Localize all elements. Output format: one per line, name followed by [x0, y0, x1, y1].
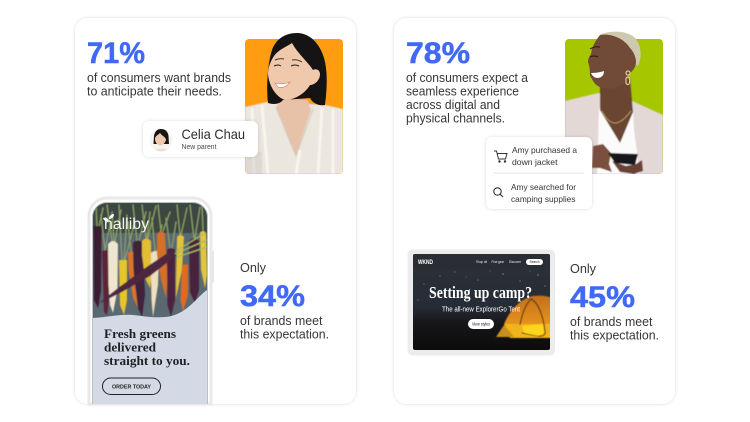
text: seamless experience: of consumers expect a [406, 70, 529, 85]
photo: smiling woman on orange [245, 33, 343, 174]
panel: seamless experience card [394, 18, 675, 404]
text: anticipate needs [87, 70, 231, 98]
panel: personalization card [75, 18, 356, 404]
headline: fresh greens: Fresh greens [104, 327, 176, 341]
stat block: 45%: Only [570, 261, 596, 276]
chip: customer journey activity [486, 137, 592, 209]
logo: halliby: halliby [104, 216, 149, 233]
headline: fresh greens [104, 327, 190, 368]
stat: 78%: 78% [406, 37, 470, 70]
text: searched camping: camping supplies [511, 194, 576, 204]
nav: WKND: Search [530, 260, 540, 264]
button: order today: ORDER TODAY [112, 384, 151, 390]
text: anticipate needs: to anticipate their needs. [87, 84, 222, 98]
text: searched camping [511, 182, 576, 204]
button: view styles: View styles [472, 322, 491, 327]
stat block: 34% [240, 260, 329, 342]
stat block: 45%: this expectation. [570, 328, 659, 342]
headline: fresh greens: delivered [104, 340, 156, 354]
stat block: 45% [570, 261, 659, 342]
text: searched camping: Amy searched for [511, 182, 576, 192]
carrot photo [93, 203, 207, 317]
nav: WKND: Shop all [476, 260, 487, 264]
stat: 71%: 71% [87, 37, 145, 70]
text: seamless experience: physical channels. [406, 110, 505, 126]
phone mockup: halliby [89, 198, 214, 404]
nav: WKND [418, 259, 543, 266]
button: order today [102, 378, 160, 394]
nav: WKND: Discover [509, 260, 522, 264]
text: seamless experience: across digital and [406, 97, 500, 112]
nav: WKND: Find gear [492, 260, 505, 264]
tablet mockup: WKND [408, 250, 555, 356]
text: anticipate needs: of consumers want brands [87, 70, 231, 85]
text: seamless experience: seamless experience [406, 84, 519, 98]
text: purchased jacket: Amy purchased a [512, 145, 577, 155]
stat block: 34%: Only [240, 260, 266, 275]
stat block: 34%: 34% [240, 280, 305, 313]
headline: setting up camp: Setting up camp? [429, 283, 532, 302]
icon: avatar [150, 128, 172, 154]
stat block: 45%: of brands meet [570, 314, 653, 329]
text: purchased jacket: down jacket [512, 157, 558, 167]
headline: fresh greens: straight to you. [104, 354, 190, 368]
icon: search [494, 188, 503, 197]
name: Celia Chau [182, 126, 245, 142]
chip: Celia Chau profile [143, 121, 258, 157]
photo: woman with phone on green [565, 32, 663, 174]
button: view styles [468, 319, 494, 329]
text: seamless experience [406, 70, 529, 126]
nav: WKND: WKND [418, 260, 434, 266]
role: New parent [182, 144, 217, 151]
panel: phone copy background [93, 290, 207, 404]
stat block: 34%: this expectation. [240, 326, 329, 342]
stat block: 34%: of brands meet [240, 313, 323, 328]
icon: shopping cart [494, 151, 507, 162]
illustration: glowing tent [496, 296, 552, 338]
subhead: ExplorerGo Tent: The all-new ExplorerGo Tent [442, 304, 521, 314]
text: purchased jacket [512, 145, 577, 167]
stat block: 45%: 45% [570, 281, 635, 314]
